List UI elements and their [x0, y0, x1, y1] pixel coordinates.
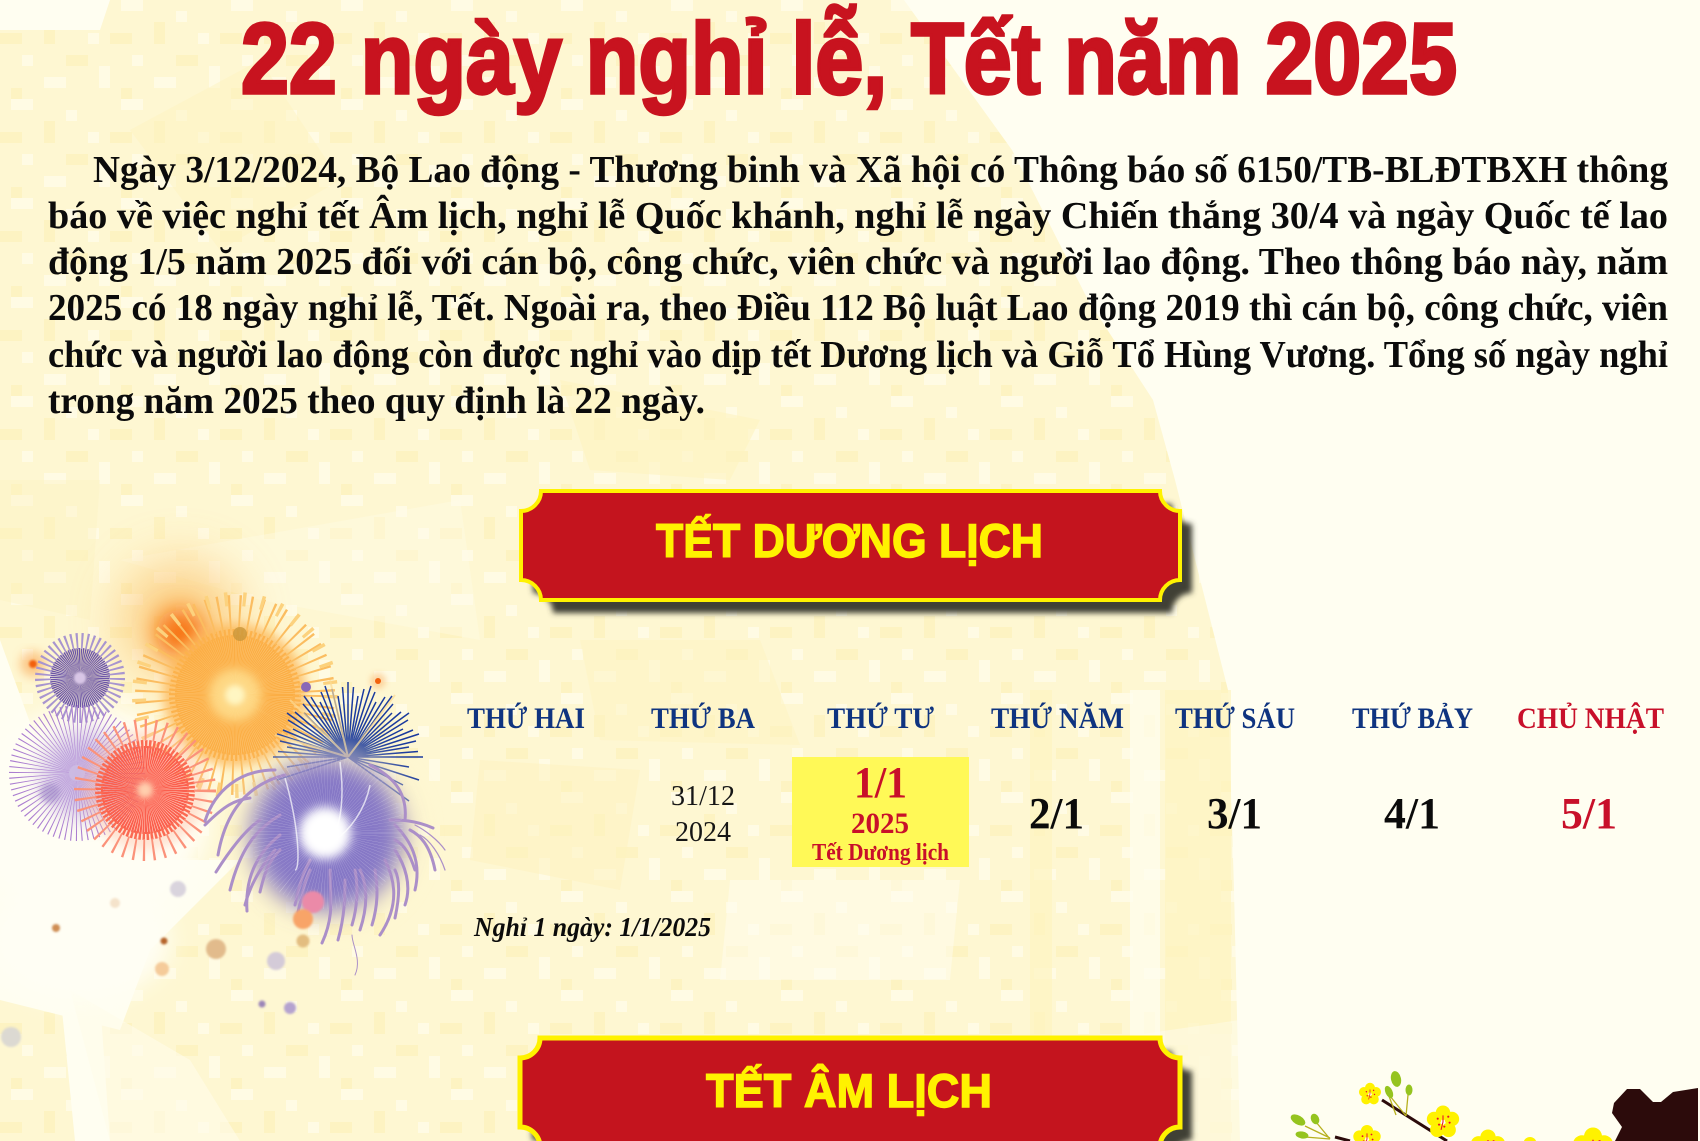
- holiday cell 1/1: 2025: [851, 807, 909, 840]
- banner: Tết Dương lịch: TẾT DƯƠNG LỊCH: [656, 514, 1043, 567]
- date numbers: [1029, 789, 1617, 838]
- note: days off: Nghỉ 1 ngày: 1/1/2025: [473, 912, 711, 942]
- intro paragraph: báo về việc nghỉ tết Âm lịch, nghỉ lễ Quốc khánh, nghỉ lễ ngày Chiến thắng 30/4 và ngày Quốc tế lao: [48, 195, 1668, 237]
- intro paragraph: 2025 có 18 ngày nghỉ lễ, Tết. Ngoài ra, theo Điều 112 Bộ luật Lao động 2019 thì cán bộ, công chức, viên: [48, 287, 1668, 329]
- date numbers: 5/1: [1561, 789, 1617, 838]
- holiday cell 1/1: Tết Dương lịch: [812, 840, 949, 866]
- intro paragraph: động 1/5 năm 2025 đối với cán bộ, công chức, viên chức và người lao động. Theo thông báo này, năm: [48, 241, 1668, 283]
- weekday headers: CHỦ NHẬT: [1517, 702, 1664, 735]
- firework: blue spokes: [273, 680, 423, 801]
- banner: Tết Âm lịch: TẾT ÂM LỊCH: [706, 1064, 992, 1117]
- illustration: apricot blossom branch: [1289, 1070, 1698, 1141]
- branch silhouette: [1612, 1088, 1698, 1141]
- twigs: [1335, 1100, 1447, 1141]
- firework: big purple: [205, 741, 445, 975]
- weekday headers: THỨ HAI: [467, 702, 585, 735]
- blossoms: [1353, 1083, 1613, 1141]
- previous year date: 31/12: [671, 780, 735, 812]
- intro paragraph: trong năm 2025 theo quy định là 22 ngày.: [48, 380, 705, 422]
- banner: Tết Âm lịch: [520, 1038, 1192, 1141]
- firework: red: [85, 730, 205, 850]
- weekday headers: THỨ NĂM: [991, 702, 1124, 735]
- intro paragraph: chức và người lao động còn được nghỉ vào dịp tết Dương lịch và Giỗ Tổ Hùng Vương. Tổng số ngày nghỉ: [48, 334, 1668, 376]
- weekday headers: THỨ BẢY: [1352, 702, 1473, 735]
- firework: bokeh dots: [1, 881, 324, 1047]
- weekday headers: THỨ TƯ: [827, 702, 934, 735]
- background: pale emblem pattern: [0, 0, 1240, 1141]
- previous year date: [671, 780, 735, 848]
- holiday cell 1/1: [792, 757, 969, 867]
- firework: small purple: [43, 641, 117, 715]
- date numbers: 4/1: [1384, 789, 1440, 838]
- firework: light purple spokes: [39, 733, 127, 817]
- illustration: fireworks: [0, 560, 445, 1047]
- firework: orange: [139, 599, 331, 791]
- date numbers: 2/1: [1029, 789, 1084, 838]
- intro paragraph: [48, 149, 1668, 422]
- previous year date: 2024: [675, 816, 731, 848]
- weekday headers: THỨ BA: [651, 702, 755, 735]
- calendar: Tết Dương lịch week: [467, 702, 1664, 942]
- banner: Tết Dương lịch: [521, 491, 1192, 613]
- holiday cell 1/1: 1/1: [854, 758, 907, 807]
- firework glows: [0, 560, 386, 1000]
- date numbers: 3/1: [1207, 789, 1262, 838]
- intro paragraph: Ngày 3/12/2024, Bộ Lao động - Thương binh và Xã hội có Thông báo số 6150/TB-BLĐTBXH thông: [93, 149, 1668, 191]
- title: 22 ngày nghỉ lễ, Tết năm 2025: [241, 3, 1457, 115]
- buds: [1289, 1070, 1412, 1140]
- weekday headers: [467, 702, 1664, 735]
- weekday headers: THỨ SÁU: [1175, 702, 1295, 735]
